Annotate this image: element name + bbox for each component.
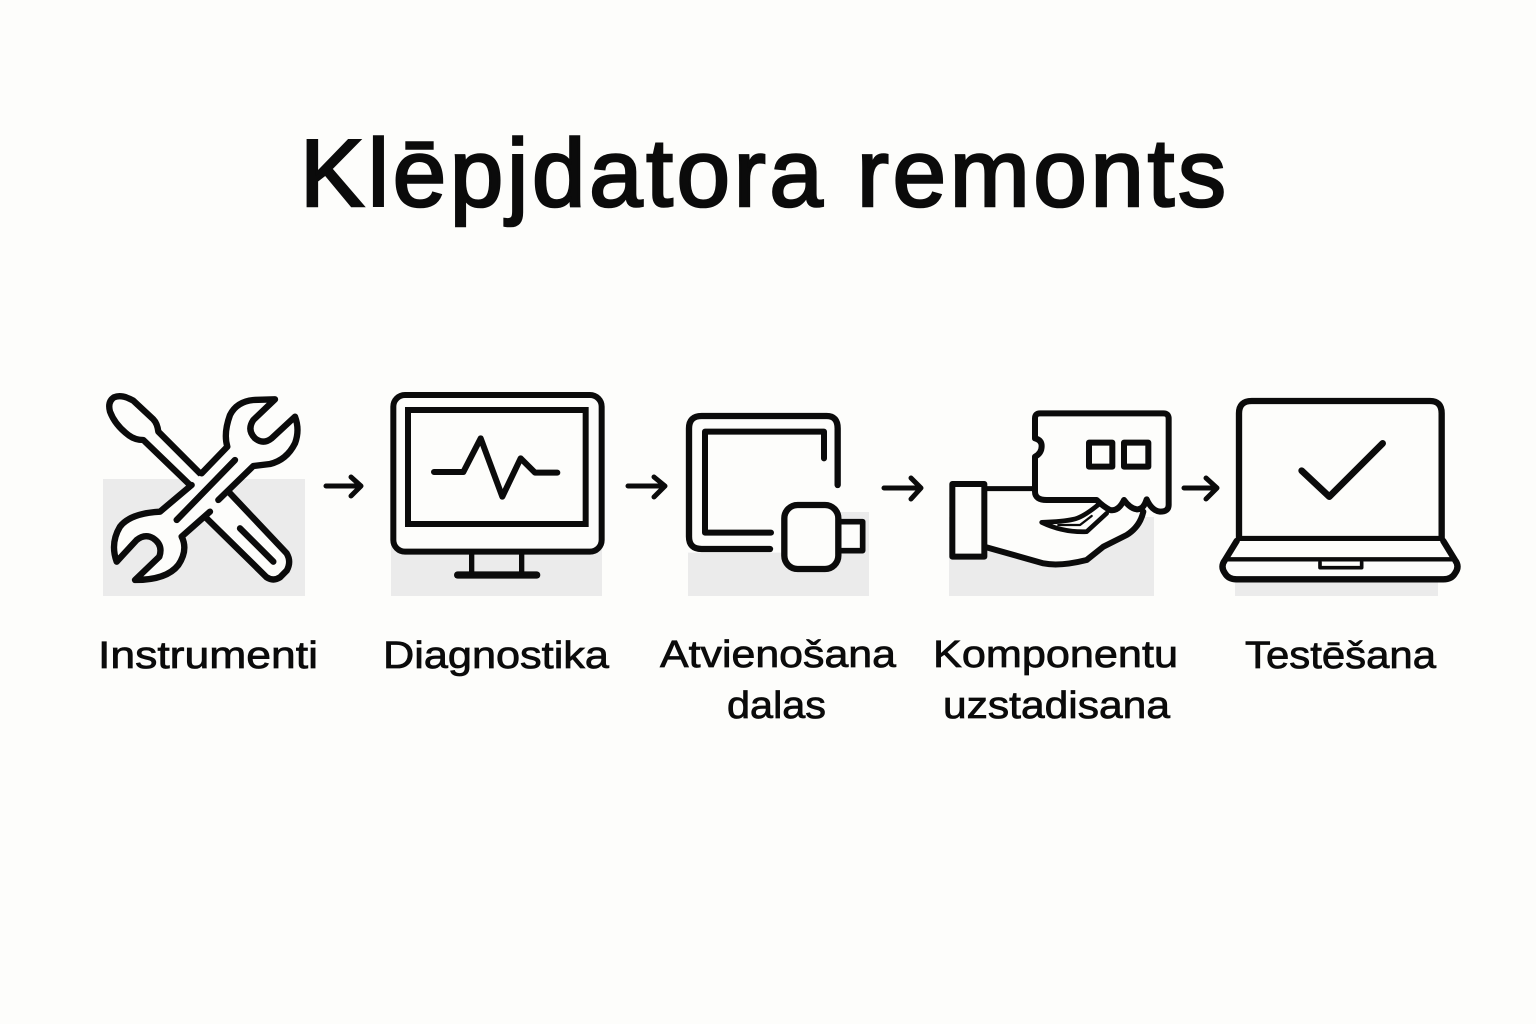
icon background: step 3 bbox=[688, 512, 869, 596]
step 3: Atvienošana dalas bbox=[660, 413, 897, 727]
label: Atvienošana dalas: Atvienošana bbox=[660, 634, 897, 676]
step 1: Instrumenti bbox=[98, 396, 318, 677]
icon background: step 2 bbox=[391, 540, 602, 596]
label: Atvienošana dalas: dalas bbox=[727, 685, 826, 727]
icon: laptop with check mark bbox=[1222, 401, 1457, 579]
arrow 2 bbox=[628, 477, 665, 497]
arrow 1 bbox=[326, 477, 361, 496]
label: Testēšana: Testēšana bbox=[1245, 635, 1437, 677]
label: Diagnostika: Diagnostika bbox=[383, 635, 610, 677]
icon: crossed screwdriver and wrench bbox=[109, 396, 297, 580]
step 2: Diagnostika bbox=[383, 395, 610, 677]
arrow 4 bbox=[1184, 478, 1217, 499]
icon: monitor with pulse bbox=[393, 395, 602, 575]
step 5: Testēšana bbox=[1222, 401, 1457, 677]
icon background: step 1 bbox=[103, 479, 305, 596]
icon: tablet with detached module bbox=[686, 413, 863, 569]
label: Komponentu uzstadisana bbox=[933, 634, 1178, 727]
title: Klēpjdatora remonts bbox=[300, 120, 1226, 227]
label: Komponentu uzstadisana: Komponentu bbox=[933, 634, 1178, 676]
label: Komponentu uzstadisana: uzstadisana bbox=[943, 685, 1171, 727]
label: Instrumenti: Instrumenti bbox=[98, 635, 318, 677]
icon: hand holding memory card bbox=[952, 413, 1169, 565]
step 4: Komponentu uzstadisana bbox=[933, 413, 1178, 727]
icon background: step 5 bbox=[1235, 570, 1438, 596]
label: Atvienošana dalas bbox=[660, 634, 897, 727]
icon background: step 4 bbox=[949, 517, 1154, 596]
arrow 3 bbox=[884, 478, 921, 499]
